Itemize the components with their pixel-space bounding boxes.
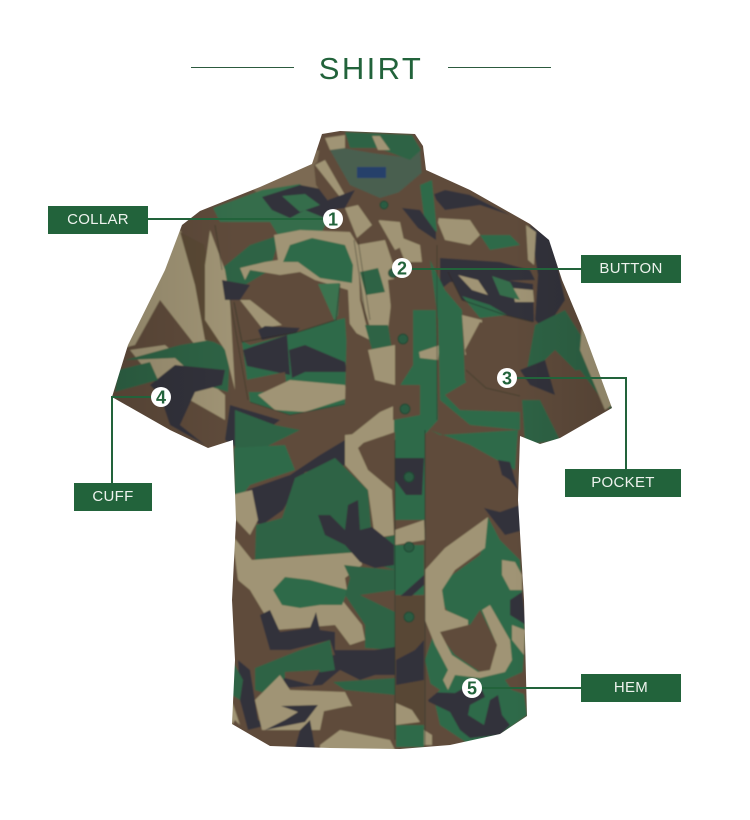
label: pocket: POCKET <box>591 474 655 491</box>
marker 5 <box>462 678 482 698</box>
label: collar <box>48 206 148 234</box>
marker 3: 3 <box>502 368 512 388</box>
marker 1: 1 <box>328 210 338 230</box>
placket top <box>378 220 405 250</box>
right pocket <box>464 322 483 356</box>
marker 3 <box>497 368 517 388</box>
label: hem: HEM <box>614 679 648 696</box>
left pocket <box>242 318 350 415</box>
marker 2: 2 <box>397 258 407 278</box>
marker 2 <box>392 258 412 278</box>
camo lower right <box>430 430 518 470</box>
title rule right <box>448 67 551 68</box>
label: button <box>581 255 681 283</box>
camo center chest <box>358 239 394 326</box>
label: collar: COLLAR <box>67 211 129 228</box>
label: cuff: CUFF <box>92 488 134 505</box>
shirt illustration <box>100 120 630 760</box>
neck label <box>357 167 386 178</box>
connector: button <box>402 268 581 270</box>
label: hem <box>581 674 681 702</box>
title: SHIRT <box>319 51 423 86</box>
marker 4: 4 <box>156 388 166 408</box>
connector: pocket <box>507 378 626 469</box>
camo lower left <box>234 444 296 494</box>
connector: hem <box>472 687 581 689</box>
camo chest left <box>254 150 320 192</box>
title rule left <box>191 67 294 68</box>
collar <box>318 150 351 188</box>
stitch seams <box>215 225 520 420</box>
marker 1 <box>323 209 343 230</box>
marker 4 <box>151 387 171 408</box>
camo chest right <box>426 172 545 270</box>
camo left sleeve <box>127 230 207 348</box>
camo right sleeve <box>530 225 565 330</box>
dark branch at hem <box>428 688 510 738</box>
right pocket flap <box>453 280 534 322</box>
camo hem left <box>255 675 352 730</box>
label: button: BUTTON <box>599 260 663 277</box>
marker 5: 5 <box>467 678 477 698</box>
connector: cuff <box>112 397 161 483</box>
camo placket <box>395 430 425 520</box>
camo mid belly <box>232 535 365 645</box>
left pocket flap <box>244 322 327 346</box>
label: pocket <box>565 469 681 497</box>
buttons <box>380 201 414 622</box>
label: cuff <box>74 483 152 511</box>
connector: collar <box>148 218 333 220</box>
